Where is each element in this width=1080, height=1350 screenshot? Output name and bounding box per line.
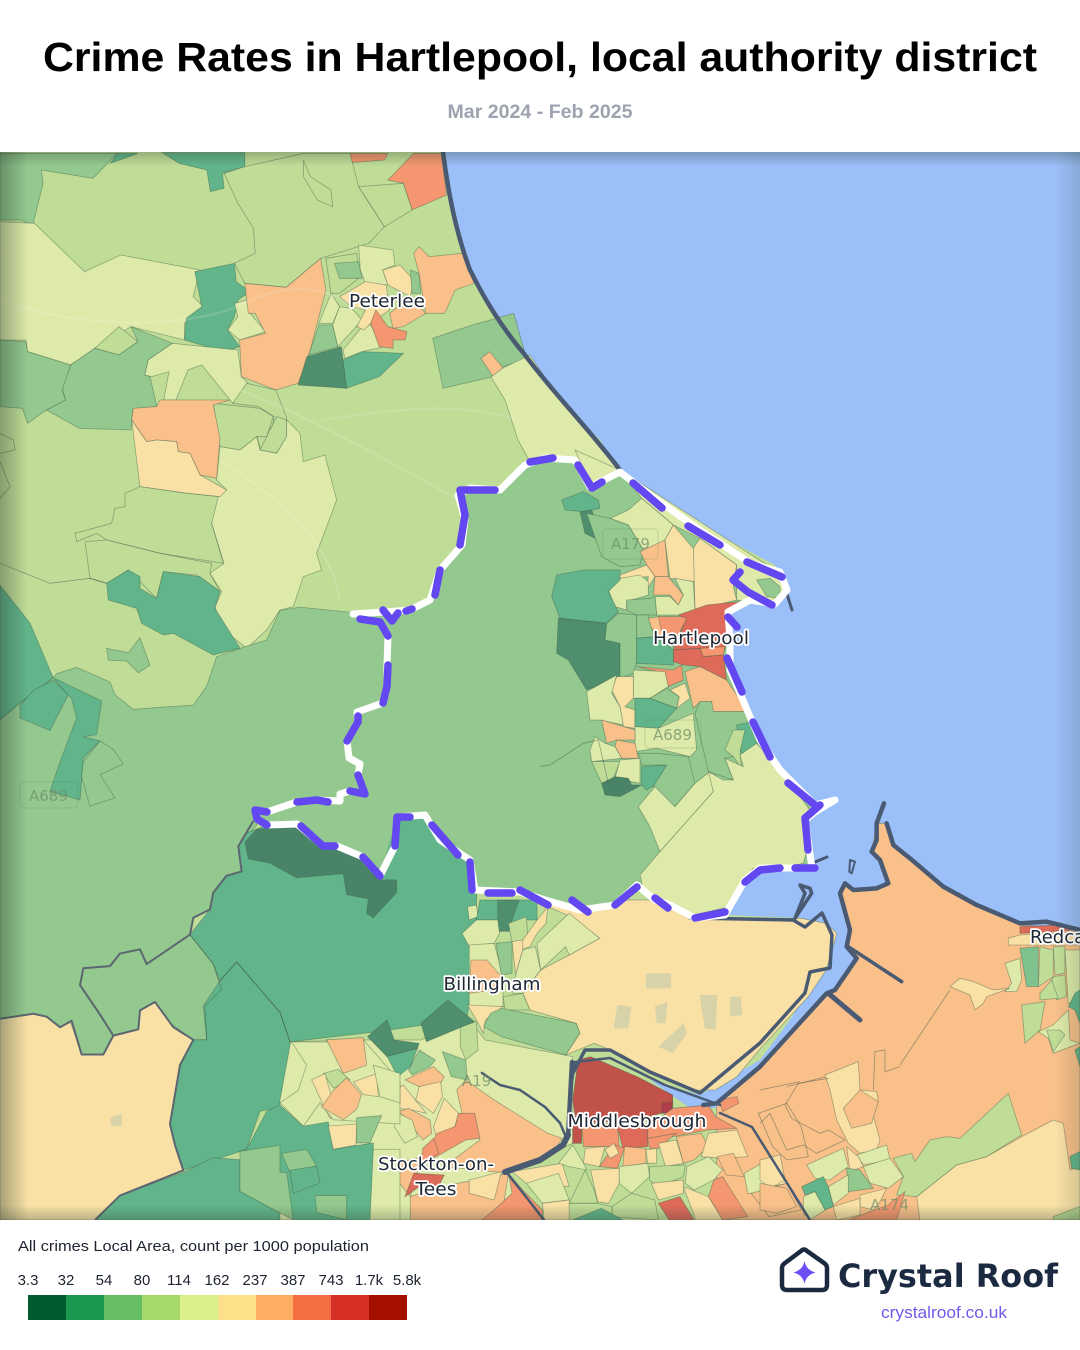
- legend scale labels: 54: [96, 1272, 112, 1289]
- place labels: Hartlepool: [653, 628, 749, 649]
- road shield labels: A689: [653, 726, 692, 744]
- legend scale labels: 3.3: [18, 1272, 38, 1289]
- legend scale labels: 162: [204, 1272, 230, 1289]
- website url: crystalroof.co.uk: [881, 1304, 1008, 1322]
- road shield labels: A174: [870, 1196, 909, 1214]
- road shield labels: A19: [462, 1072, 491, 1090]
- place labels: Middlesbrough: [568, 1111, 706, 1132]
- place labels: Billingham: [444, 974, 540, 995]
- legend scale labels: 80: [134, 1272, 150, 1289]
- icon: house with star: [782, 1250, 827, 1290]
- sea: [443, 152, 1080, 1108]
- place labels: Peterlee: [349, 291, 425, 312]
- pale coastal strip: [490, 354, 616, 468]
- legend scale labels: 1.7k: [355, 1272, 384, 1289]
- legend scale labels: 32: [58, 1272, 74, 1289]
- Hartlepool wards: [540, 450, 810, 915]
- south-east Redcar peach district: [717, 823, 1080, 1220]
- legend heading: All crimes Local Area, count per 1000 population: [18, 1238, 369, 1255]
- legend scale labels: 237: [242, 1272, 268, 1289]
- rivers and coast lines: [443, 152, 1080, 1220]
- south-east wards: [760, 925, 1080, 1220]
- Hartlepool district interior: [255, 458, 815, 918]
- choropleth map: [0, 152, 1080, 1220]
- south mosaic: Billingham Stockton Middlesbrough wards: [280, 900, 826, 1220]
- Teesmouth coast and jetties: [703, 803, 1080, 1105]
- place labels: [349, 291, 1080, 1200]
- west district base polygons: [0, 585, 477, 1220]
- legend: [18, 1238, 422, 1320]
- central west wards: [0, 400, 337, 655]
- Seal Sands cream district: [523, 900, 837, 1090]
- Stockton west ward mosaic: [240, 1038, 400, 1220]
- Hartlepool district boundary: [255, 458, 835, 918]
- place labels: Stockton-on-: [378, 1154, 494, 1175]
- boundary purple dashes: [255, 458, 820, 918]
- legend scale labels: 5.8k: [393, 1272, 422, 1289]
- brand name: Crystal Roof: [838, 1257, 1059, 1295]
- road network: [0, 288, 520, 675]
- north region polygons: [0, 153, 524, 452]
- boundary white outline: [255, 458, 835, 918]
- legend colour ramp: [28, 1295, 407, 1320]
- road shield labels: A179: [611, 535, 650, 553]
- legend scale labels: 114: [167, 1272, 191, 1289]
- legend scale labels: [18, 1272, 422, 1289]
- Crystal Roof logo: [782, 1250, 1059, 1322]
- date subtitle: Mar 2024 - Feb 2025: [448, 102, 633, 123]
- legend scale labels: 387: [280, 1272, 306, 1289]
- road shield labels: A689: [29, 787, 68, 805]
- road shield labels: [20, 529, 909, 1214]
- place labels: Tees: [414, 1179, 456, 1200]
- title: Crime Rates in Hartlepool, local authority district: [43, 34, 1037, 80]
- county border lines: [0, 821, 253, 1220]
- legend scale labels: 743: [318, 1272, 344, 1289]
- map vignette: [0, 152, 1080, 1220]
